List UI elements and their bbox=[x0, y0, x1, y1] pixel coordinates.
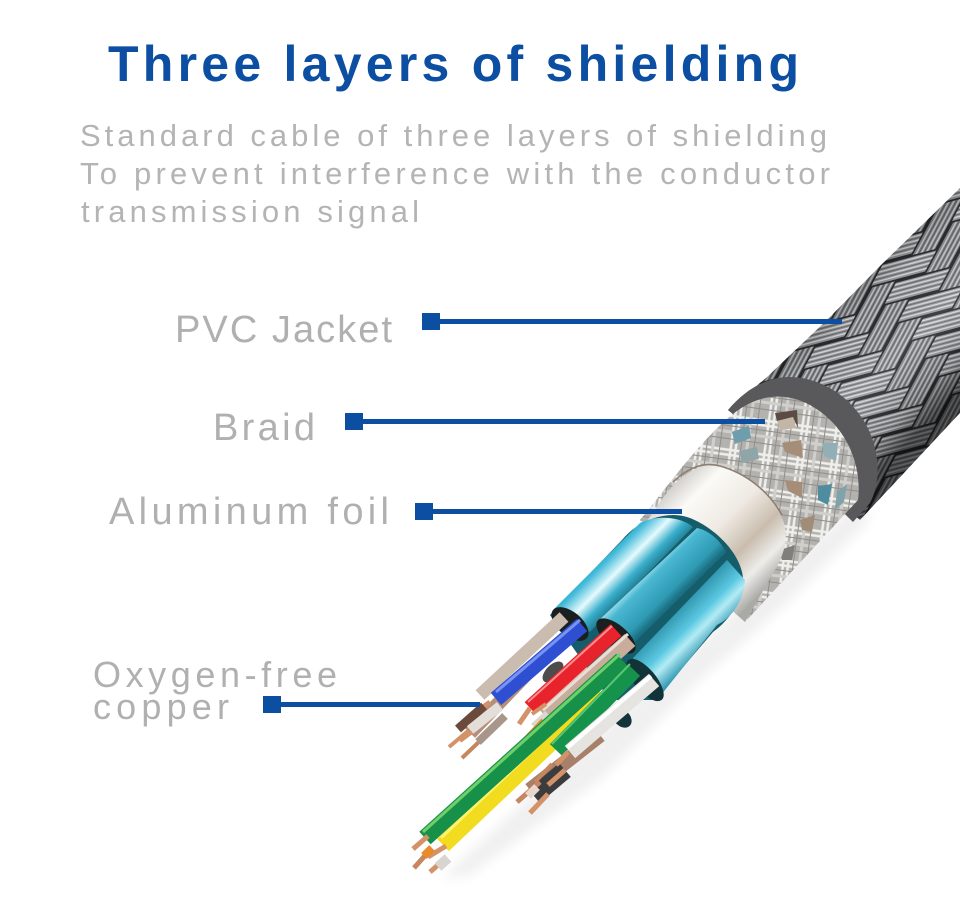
leader: Oxygen-free copper bbox=[263, 696, 480, 713]
subtitle text block: Standard cable of three layers of shielding bbox=[80, 118, 827, 153]
group 1 wires bbox=[449, 617, 582, 758]
title: Three layers of shielding bbox=[108, 36, 799, 92]
small shadow blob bbox=[539, 658, 567, 686]
inner shield tube 2 bbox=[597, 528, 726, 645]
leader: PVC Jacket bbox=[422, 313, 842, 330]
label: Aluminum foil bbox=[109, 491, 682, 533]
leader: Aluminum foil bbox=[415, 503, 682, 520]
label: PVC Jacket bbox=[175, 309, 842, 351]
group 4 wires bbox=[517, 664, 654, 813]
inner shield tube 3 bbox=[633, 560, 745, 700]
label: Oxygen-free copper bbox=[93, 654, 480, 727]
label: Braid bbox=[213, 407, 765, 449]
tube 2 opening bbox=[591, 612, 641, 660]
label: Braid: Braid bbox=[213, 407, 315, 449]
braid shield layer bbox=[640, 396, 859, 622]
subtitle text block: To prevent interference with the conductor bbox=[80, 156, 830, 191]
tube 3 opening shadow bbox=[609, 705, 635, 731]
jacket end ring bbox=[728, 377, 878, 522]
subtitle text block: transmission signal bbox=[81, 194, 419, 229]
leader: Braid bbox=[345, 413, 765, 430]
tube 3 opening bbox=[620, 653, 670, 707]
group 3 wires: orange, yellow, green bbox=[413, 654, 622, 872]
teal bundle base bbox=[550, 515, 743, 700]
aluminum foil layer bbox=[640, 464, 786, 622]
cable illustration bbox=[413, 170, 960, 880]
subtitle text block bbox=[80, 118, 830, 229]
label: Oxygen-free copper: copper bbox=[93, 686, 229, 727]
soft shadow bbox=[440, 500, 870, 880]
braid windows bbox=[732, 410, 847, 560]
group 2 wires bbox=[519, 626, 630, 735]
inner shield tube 1 bbox=[553, 518, 693, 632]
label: Aluminum foil: Aluminum foil bbox=[109, 491, 389, 533]
foil edge bbox=[673, 465, 782, 515]
tube 1 opening bbox=[545, 601, 595, 647]
label: Oxygen-free copper: Oxygen-free bbox=[93, 654, 337, 695]
braided jacket bbox=[728, 188, 960, 520]
label: PVC Jacket: PVC Jacket bbox=[175, 309, 392, 351]
